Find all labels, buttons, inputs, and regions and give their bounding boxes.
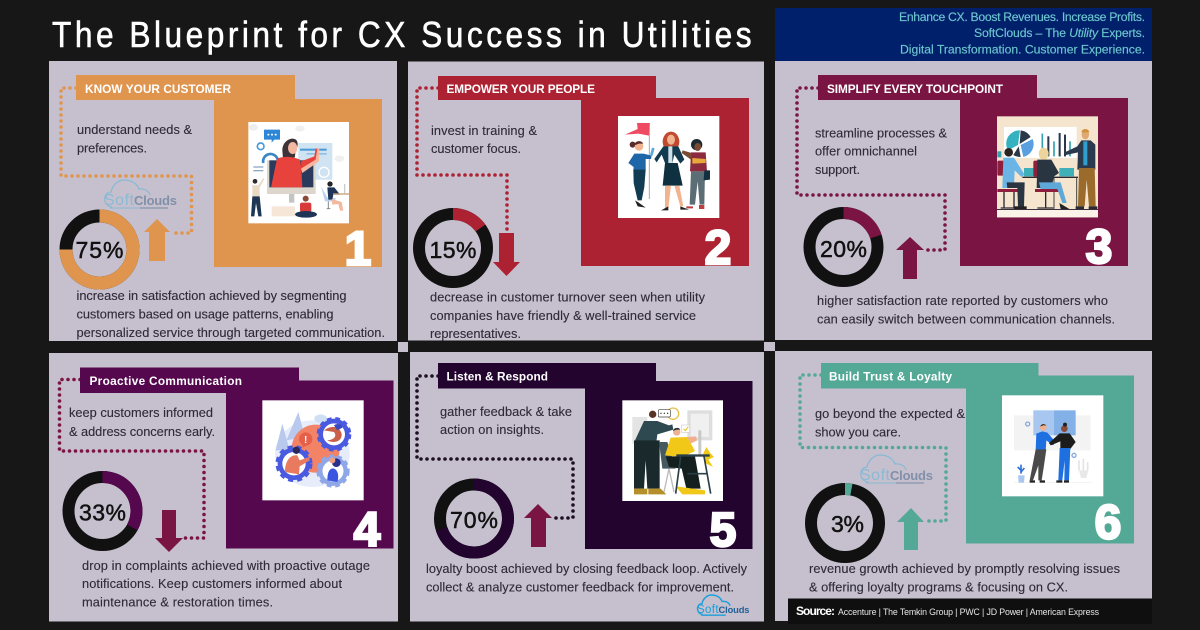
text: revenue stat xyxy=(809,561,1120,595)
logo: softclouds watermark xyxy=(860,455,933,484)
text: keep customers informed xyxy=(69,405,215,439)
text: turnover stat xyxy=(430,290,706,341)
heading: empower your people: EMPOWER YOUR PEOPLE xyxy=(446,82,595,96)
donut chart: 20%: 20% xyxy=(820,236,867,262)
connector: dotted path 1 xyxy=(61,88,192,233)
text: loyalty stat: loyalty boost achieved by closing feedback loop. Actively xyxy=(426,561,748,576)
text: understand needs: preferences. xyxy=(77,140,147,156)
color block 6 xyxy=(966,376,1134,544)
illustration: handshake xyxy=(1002,395,1103,496)
heading: know your customer: KNOW YOUR CUSTOMER xyxy=(85,82,231,96)
heading: simplify every touchpoint: SIMPLIFY EVERY TOUCHPOINT xyxy=(827,82,1004,96)
text: complaints stat: maintenance & restoration times. xyxy=(82,595,273,610)
arrow: up xyxy=(897,508,924,550)
text: streamline processes: offer omnichannel xyxy=(815,144,917,158)
color block 3 xyxy=(960,98,1128,266)
logo: softclouds watermark xyxy=(104,180,177,209)
donut chart: 15% xyxy=(419,214,487,282)
number 1: 1 xyxy=(345,223,371,276)
text: streamline processes xyxy=(815,126,947,177)
text: gather feedback: action on insights. xyxy=(440,422,544,437)
arrow: up xyxy=(524,504,552,547)
heading: empower your people xyxy=(438,76,656,100)
source bar: Source: xyxy=(796,604,835,618)
donut chart: 33% xyxy=(68,477,136,545)
panel: empower your people xyxy=(408,62,764,341)
donut chart: 75%: 75% xyxy=(76,237,124,263)
heading: proactive communication: Proactive Communication xyxy=(90,374,242,388)
text: satisfaction stat xyxy=(76,288,385,340)
text: streamline processes: streamline processes & xyxy=(815,126,947,140)
donut chart: 33%: 33% xyxy=(79,500,126,526)
arrow: down xyxy=(493,233,520,276)
tagline banner: SoftClouds – The Utility Experts. xyxy=(974,26,1145,40)
text: revenue stat: revenue growth achieved by promptly resolving issues xyxy=(809,561,1120,576)
text: loyalty stat: collect & analyze customer feedback for improvement. xyxy=(426,580,734,595)
text: invest in training xyxy=(431,123,537,156)
panel: build trust and loyalty xyxy=(775,351,1152,621)
title: The Blueprint for CX Success in Utilities xyxy=(52,15,752,55)
text: go beyond: go beyond the expected & xyxy=(815,406,965,421)
logo: softclouds xyxy=(697,595,750,616)
text: turnover stat: representatives. xyxy=(430,326,521,341)
heading: build trust and loyalty: Build Trust & Loyalty xyxy=(829,370,952,384)
number 3: 3 xyxy=(1086,221,1112,274)
donut chart: 3%: 3% xyxy=(831,511,864,537)
heading: build trust and loyalty xyxy=(821,363,1038,388)
connector: dotted path 5 xyxy=(417,376,573,518)
text: gather feedback xyxy=(440,404,572,437)
text: keep customers informed: keep customers informed xyxy=(69,405,213,420)
text: satisfaction stat: personalized service through targeted communication. xyxy=(76,325,385,340)
arrow: up xyxy=(144,219,170,261)
illustration: customer insight xyxy=(248,122,349,223)
panel: proactive communication xyxy=(49,353,398,622)
panel: know your customer xyxy=(49,61,397,341)
connector: dotted path 3 xyxy=(797,88,945,250)
number 6: 6 xyxy=(1095,496,1121,550)
text: invest in training: invest in training & xyxy=(431,123,537,138)
number 2: 2 xyxy=(705,222,731,275)
logo: softclouds watermark: Soft xyxy=(104,192,135,209)
illustration: connected gears xyxy=(262,400,364,500)
arrow: down xyxy=(155,510,183,552)
text: turnover stat: decrease in customer turnover seen when utility xyxy=(430,290,706,305)
logo: softclouds watermark: Clouds xyxy=(890,468,933,483)
logo: softclouds watermark: Soft xyxy=(860,467,891,484)
logo: softclouds watermark: Clouds xyxy=(134,193,177,208)
donut chart: 75% xyxy=(66,216,133,283)
donut chart: 70% xyxy=(440,484,508,552)
logo: softclouds: Clouds xyxy=(719,605,749,615)
tagline banner xyxy=(775,8,1152,61)
donut chart: 3% xyxy=(811,489,879,557)
illustration: manager and employee xyxy=(622,400,723,501)
text: invest in training: customer focus. xyxy=(431,141,521,156)
tagline banner: Digital Transformation. Customer Experience. xyxy=(900,42,1145,56)
illustration: connected gears: ! xyxy=(304,435,307,446)
text: revenue stat: & offering loyalty programs & focusing on CX. xyxy=(809,580,1068,595)
connector: dotted path 2 xyxy=(417,88,507,232)
text: streamline processes: support. xyxy=(815,162,860,177)
text: satisfaction rate stat: can easily switch between communication channels. xyxy=(817,312,1115,327)
logo: softclouds: Soft xyxy=(697,604,719,616)
source bar: Accenture | The Temkin Group | PWC | JD Power | American Express xyxy=(838,607,1100,617)
text: loyalty stat xyxy=(426,561,748,595)
text: go beyond: show you care. xyxy=(815,425,901,440)
color block 2 xyxy=(581,98,749,266)
number 4: 4 xyxy=(354,504,381,557)
text: gather feedback: gather feedback & take xyxy=(440,404,572,419)
connector: dotted path 4 xyxy=(60,380,204,538)
connector: dotted path 6 xyxy=(800,375,946,521)
text: satisfaction stat: customers based on usage patterns, enabling xyxy=(76,306,334,322)
illustration: presentation meeting xyxy=(997,116,1098,217)
donut chart: 70%: 70% xyxy=(450,507,498,533)
text: keep customers informed: & address concerns early. xyxy=(69,424,215,439)
arrow: up xyxy=(896,237,924,279)
tagline banner: Enhance CX. Boost Revenues. Increase Profits. xyxy=(899,10,1145,24)
text: complaints stat: notifications. Keep customers informed about xyxy=(82,576,342,591)
donut chart: 15%: 15% xyxy=(430,237,476,263)
heading: listen and respond: Listen & Respond xyxy=(446,370,548,384)
heading: simplify every touchpoint xyxy=(818,75,1037,100)
text: satisfaction rate stat xyxy=(817,293,1115,327)
source bar xyxy=(788,598,1152,624)
number 5: 5 xyxy=(710,504,736,557)
panel: simplify every touchpoint xyxy=(775,61,1152,340)
color block 1 xyxy=(214,99,382,267)
illustration: team with flag xyxy=(618,116,719,218)
color block 5 xyxy=(585,381,752,549)
text: turnover stat: companies have friendly & well-trained service xyxy=(430,308,696,323)
donut chart: 20% xyxy=(810,213,878,281)
text: satisfaction rate stat: higher satisfaction rate reported by customers who xyxy=(817,293,1108,308)
text: satisfaction stat: increase in satisfaction achieved by segmenting xyxy=(76,288,346,303)
color block 4 xyxy=(226,380,394,548)
text: understand needs: understand needs & xyxy=(77,122,192,137)
panel: listen and respond xyxy=(410,352,764,622)
text: understand needs xyxy=(77,122,192,156)
heading: listen and respond xyxy=(438,363,656,388)
text: complaints stat: drop in complaints achieved with proactive outage xyxy=(82,558,370,573)
heading: know your customer xyxy=(76,75,295,100)
heading: proactive communication xyxy=(80,368,299,393)
text: go beyond xyxy=(815,406,965,440)
text: complaints stat xyxy=(82,558,370,610)
